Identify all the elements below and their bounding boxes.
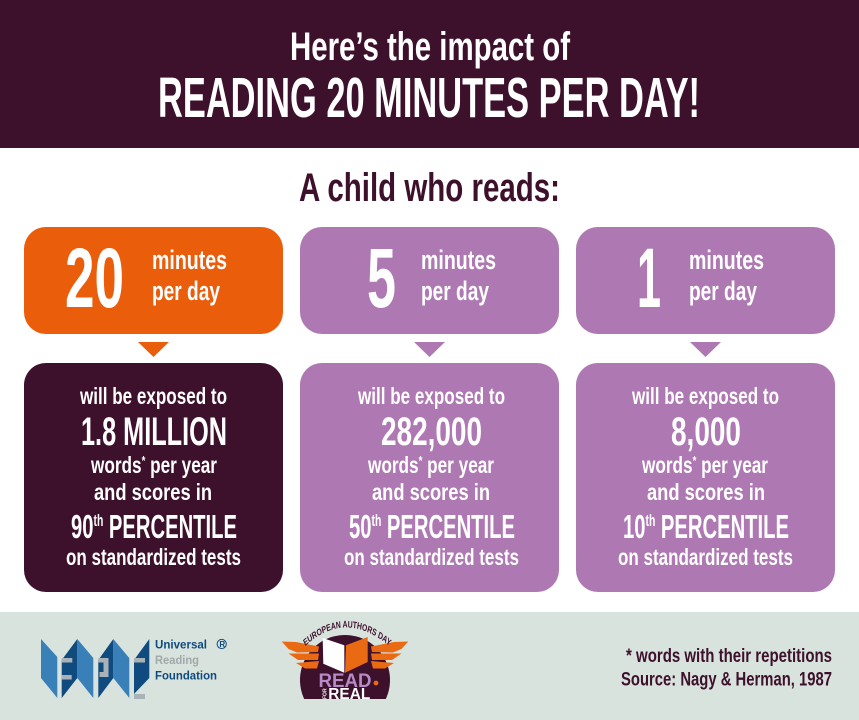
panel: 5 minutes result: will be exposed to <box>357 383 505 409</box>
panel: 5 minutes result: 282,000 <box>381 410 482 454</box>
panel: 5 minutes <box>300 227 559 334</box>
panel: 20 minutes result: words <box>91 452 159 478</box>
logo: Read for Real: FOR <box>322 688 328 699</box>
panel: 20 minutes result: * <box>142 453 146 468</box>
logo: Read for Real: EUROPEAN AUTHORS DAY <box>303 620 392 646</box>
per day label: per day <box>689 276 757 306</box>
number 1: 1 <box>637 231 661 325</box>
panel: 5 minutes result: words <box>368 452 436 478</box>
panel: 1 minute result: on standardized tests <box>618 544 793 570</box>
panel: 1 minute result: 10 <box>623 508 660 545</box>
logo: Universal Reading Foundation: R <box>219 640 225 649</box>
title line 1: Here’s the impact of <box>290 25 570 69</box>
logo: Read for Real: REAL <box>328 686 371 703</box>
arrow: 1 minute <box>690 342 721 357</box>
per day label: per day <box>421 276 489 306</box>
panel: 20 minutes result: th <box>93 511 103 530</box>
panel: 20 minutes result <box>24 363 283 592</box>
panel: 20 minutes <box>24 227 283 334</box>
footnote and source <box>621 646 832 690</box>
panel: 5 minutes result: * <box>419 453 423 468</box>
number 20: 20 <box>65 231 124 325</box>
panel: 1 minute result: * <box>693 453 697 468</box>
panel: 20 minutes result: will be exposed to <box>79 383 227 409</box>
header banner <box>0 0 859 148</box>
logo: Universal Reading Foundation: Universal <box>155 638 207 652</box>
logo: Universal Reading Foundation <box>41 638 226 699</box>
arrow: 20 minutes <box>138 342 169 357</box>
subheading: A child who reads: <box>299 166 560 210</box>
panel: 20 minutes result: 90 <box>71 508 108 545</box>
panel: 1 minute result: and scores in <box>647 479 765 505</box>
per day label: per day <box>152 276 220 306</box>
footer band <box>0 612 859 720</box>
panel: 1 minute result: per year <box>696 452 768 478</box>
panel: 5 minutes result: 50 <box>349 508 386 545</box>
panel: 1 minute result: 8,000 <box>671 410 741 454</box>
panel: 1 minute <box>576 227 835 334</box>
panel: 1 minute result: th <box>645 511 655 530</box>
panel: 1 minute result: will be exposed to <box>631 383 779 409</box>
panel: 5 minutes result: PERCENTILE <box>381 508 515 545</box>
logo: Read for Real <box>282 620 408 703</box>
panel: 5 minutes result <box>300 363 559 592</box>
panel: 20 minutes result: PERCENTILE <box>103 508 237 545</box>
panel: 5 minutes result: per year <box>422 452 494 478</box>
panel: 20 minutes result: 1.8 MILLION <box>81 410 227 454</box>
logo: Universal Reading Foundation: Foundation <box>155 668 217 682</box>
minutes label: minutes <box>689 245 764 275</box>
minutes label: minutes <box>421 245 496 275</box>
panel: 5 minutes result: and scores in <box>372 479 490 505</box>
panel: 1 minute result <box>576 363 835 592</box>
panel: 5 minutes result: th <box>371 511 381 530</box>
panel: 20 minutes result: per year <box>145 452 217 478</box>
logo: Universal Reading Foundation: Reading <box>155 653 199 667</box>
panel: 5 minutes result: on standardized tests <box>344 544 519 570</box>
logo: Read for Real: READ <box>318 671 372 692</box>
panel: 20 minutes result: and scores in <box>94 479 212 505</box>
panel: 1 minute result: words <box>642 452 710 478</box>
panel: 20 minutes result: on standardized tests <box>66 544 241 570</box>
minutes label: minutes <box>152 245 227 275</box>
arrow: 5 minutes <box>414 342 445 357</box>
number 5: 5 <box>367 231 396 325</box>
